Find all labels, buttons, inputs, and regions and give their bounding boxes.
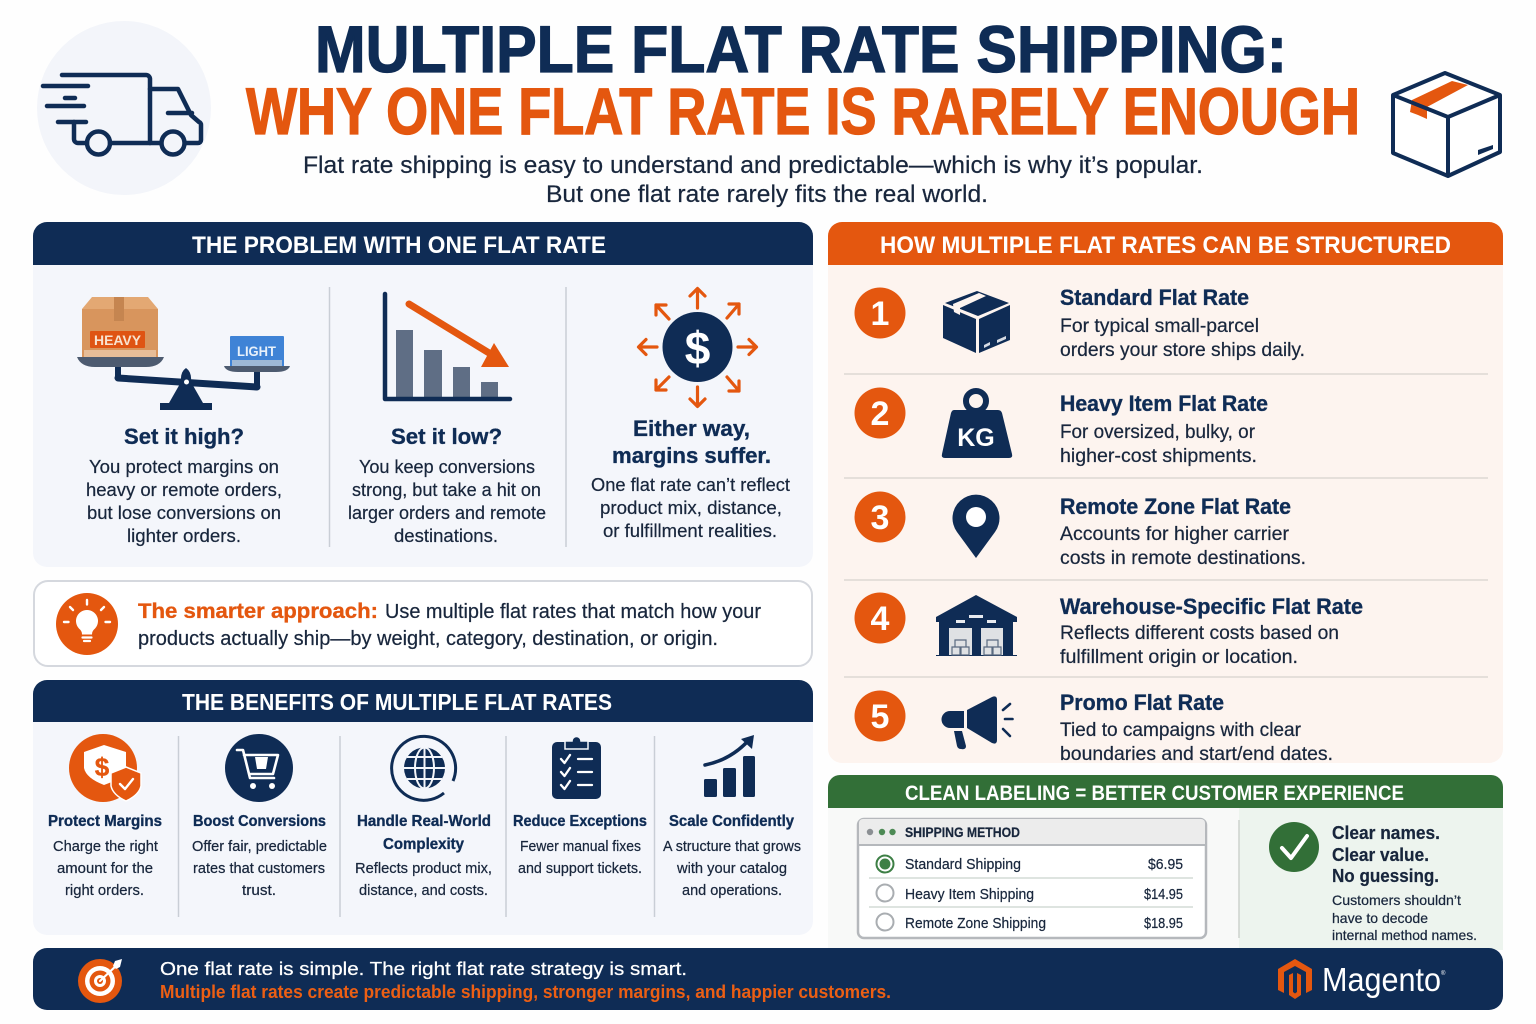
- text: handle real-world complexity: Complexity: [383, 836, 464, 853]
- logo: Magento: ®: [1441, 970, 1446, 977]
- row 1: standard flat rate: [854, 285, 1305, 361]
- icon: green check: [1269, 822, 1319, 872]
- shipping method widget: [858, 819, 1206, 938]
- icon: map pin: [952, 495, 1000, 558]
- text: warehouse-specific flat rate: [1060, 594, 1363, 668]
- callout text: Use multiple flat rates that match how your: [385, 601, 761, 623]
- text: promo flat rate: Tied to campaigns with clear: [1060, 720, 1302, 741]
- icon: light bulb: [56, 593, 118, 655]
- icon: kg weight: KG: [957, 424, 995, 452]
- icon: shopping cart: [225, 734, 293, 802]
- panel: clean labeling: [828, 775, 1503, 950]
- icon: warehouse: [936, 595, 1017, 656]
- text: protect margins: right orders.: [65, 883, 144, 899]
- heading: benefits: THE BENEFITS OF MULTIPLE FLAT RATES: [182, 689, 612, 715]
- option: heavy item shipping: $14.95: [1144, 886, 1183, 903]
- subtitle: Flat rate shipping is easy to understand and predictable—which is why it’s popular.: [303, 152, 1203, 179]
- text: either way: One flat rate can’t reflect: [591, 474, 790, 495]
- option: remote zone shipping: [876, 914, 1183, 932]
- icon: balance scale: [77, 297, 290, 410]
- heading: clean labeling: [828, 775, 1503, 808]
- text: clear names: Customers shouldn’t: [1332, 892, 1461, 908]
- icon: balance scale: LIGHT: [237, 343, 276, 359]
- footer text: One flat rate is simple. The right flat rate strategy is smart.: [160, 958, 687, 979]
- number badge 2: [854, 388, 906, 438]
- heading: problem: [33, 222, 813, 265]
- icon: parcel: [943, 291, 1010, 353]
- text: handle real-world complexity: Reflects product mix,: [355, 861, 492, 877]
- icon: kg weight: [942, 391, 1012, 458]
- icon: globe: [392, 736, 456, 800]
- text: promo flat rate: Promo Flat Rate: [1060, 690, 1224, 715]
- text: heavy item flat rate: For oversized, bulky, or: [1060, 422, 1256, 443]
- text: either way: [591, 416, 790, 541]
- text: handle real-world complexity: distance, and costs.: [359, 883, 488, 899]
- text: handle real-world complexity: [355, 813, 492, 899]
- icon: shield with dollar: $: [95, 752, 110, 782]
- text: either way: or fulfillment realities.: [603, 520, 777, 541]
- text: set it high: Set it high?: [124, 424, 244, 449]
- benefits background: [33, 722, 813, 935]
- callout text: [138, 599, 761, 650]
- footer text: Multiple flat rates create predictable shipping, stronger margins, and happier customers.: [160, 981, 891, 1002]
- icon: dollar with outward arrows: $: [685, 322, 710, 374]
- text: set it low: strong, but take a hit on: [352, 479, 541, 500]
- number badge 5: [854, 690, 906, 742]
- number badge 3: [854, 492, 906, 542]
- callout: the smarter approach: [34, 581, 812, 666]
- text: remote zone flat rate: Accounts for higher carrier: [1060, 524, 1290, 545]
- title: MULTIPLE FLAT RATE SHIPPING:: [315, 12, 1287, 86]
- icon: balance scale: HEAVY: [94, 332, 142, 348]
- text: boost conversions: [192, 813, 327, 899]
- text: warehouse-specific flat rate: Reflects different costs based on: [1060, 623, 1339, 644]
- row 4: warehouse-specific flat rate: [854, 592, 1363, 668]
- text: reduce exceptions: [513, 813, 647, 877]
- text: clear names: have to decode: [1332, 910, 1428, 926]
- text: reduce exceptions: Fewer manual fixes: [520, 839, 641, 855]
- heading: problem: THE PROBLEM WITH ONE FLAT RATE: [192, 232, 606, 259]
- structures background: [828, 265, 1503, 763]
- title: [246, 12, 1360, 148]
- panel: how multiple flat rates can be structured: [828, 222, 1503, 765]
- row 3: remote zone flat rate: [854, 492, 1306, 569]
- text: clear names: Clear value.: [1332, 844, 1429, 865]
- text: set it high: but lose conversions on: [87, 502, 281, 523]
- text: set it low: larger orders and remote: [348, 502, 546, 523]
- heading: structures: HOW MULTIPLE FLAT RATES CAN BE STRUCTURED: [880, 232, 1451, 259]
- callout text: The smarter approach:: [138, 599, 378, 623]
- text: set it high: heavy or remote orders,: [86, 479, 282, 500]
- heading: clean labeling: CLEAN LABELING = BETTER CUSTOMER EXPERIENCE: [905, 782, 1404, 805]
- clean labeling background: [828, 808, 1503, 950]
- text: standard flat rate: [1060, 285, 1305, 361]
- icon: megaphone: [942, 696, 1012, 749]
- text: handle real-world complexity: Handle Real-World: [357, 813, 491, 830]
- text: scale confidently: and operations.: [682, 883, 782, 899]
- text: boost conversions: trust.: [242, 883, 276, 899]
- number badge 4: 4: [871, 600, 890, 638]
- text: protect margins: [48, 813, 162, 899]
- text: set it high: [86, 424, 282, 546]
- text: set it low: Set it low?: [391, 424, 502, 449]
- icon: dollar with outward arrows: [638, 288, 756, 406]
- text: scale confidently: Scale Confidently: [669, 813, 794, 830]
- footer text: [160, 958, 891, 1002]
- text: clear names: internal method names.: [1332, 927, 1477, 943]
- icon: clipboard checklist: [552, 736, 601, 799]
- subtitle: [303, 152, 1203, 208]
- text: heavy item flat rate: Heavy Item Flat Rate: [1060, 391, 1268, 416]
- option: standard shipping: $6.95: [1148, 856, 1183, 873]
- text: clear names: No guessing.: [1332, 865, 1439, 886]
- text: standard flat rate: For typical small-parcel: [1060, 316, 1259, 337]
- icon: shield with dollar: [69, 734, 141, 802]
- text: promo flat rate: [1060, 690, 1333, 765]
- text: set it high: lighter orders.: [127, 525, 241, 546]
- text: either way: Either way,: [633, 416, 750, 441]
- logo: Magento: [1278, 959, 1446, 999]
- text: warehouse-specific flat rate: fulfillment origin or location.: [1060, 647, 1298, 668]
- subtitle: But one flat rate rarely fits the real world.: [546, 181, 988, 208]
- text: clear names: Clear names.: [1332, 822, 1440, 843]
- shipping method widget: SHIPPING METHOD: [905, 825, 1020, 840]
- text: reduce exceptions: Reduce Exceptions: [513, 813, 647, 830]
- option: heavy item shipping: [876, 884, 1183, 903]
- option: standard shipping: Standard Shipping: [905, 856, 1021, 873]
- text: clear names: [1332, 822, 1477, 943]
- text: protect margins: Protect Margins: [48, 813, 162, 830]
- text: remote zone flat rate: [1060, 494, 1306, 569]
- heading: structures: [828, 222, 1503, 265]
- text: set it high: You protect margins on: [89, 456, 279, 477]
- text: standard flat rate: orders your store ships daily.: [1060, 340, 1305, 361]
- chart: falling bars with arrow: [385, 294, 510, 399]
- text: either way: product mix, distance,: [600, 497, 782, 518]
- text: set it low: You keep conversions: [359, 456, 535, 477]
- icon: shipping box: [1393, 73, 1500, 176]
- panel background: [33, 265, 813, 567]
- text: boost conversions: rates that customers: [193, 861, 325, 877]
- text: set it low: destinations.: [394, 525, 498, 546]
- text: boost conversions: Offer fair, predictable: [192, 839, 327, 855]
- text: standard flat rate: Standard Flat Rate: [1060, 285, 1249, 310]
- text: remote zone flat rate: Remote Zone Flat Rate: [1060, 494, 1291, 519]
- number badge 1: [854, 288, 906, 338]
- text: protect margins: Charge the right: [53, 839, 158, 855]
- option: heavy item shipping: Heavy Item Shipping: [905, 886, 1034, 903]
- row 5: promo flat rate: [854, 690, 1333, 765]
- footer banner: [33, 948, 1503, 1010]
- icon: target: [78, 959, 122, 1003]
- text: set it low: [348, 424, 546, 546]
- text: heavy item flat rate: [1060, 391, 1268, 467]
- number badge 2: 2: [871, 395, 889, 433]
- callout text: products actually ship—by weight, category, destination, or origin.: [138, 628, 718, 650]
- text: protect margins: amount for the: [57, 861, 153, 877]
- text: scale confidently: [663, 813, 801, 899]
- panel: the problem with one flat rate: [33, 222, 813, 567]
- text: reduce exceptions: and support tickets.: [518, 861, 642, 877]
- option: remote zone shipping: Remote Zone Shipping: [905, 915, 1046, 932]
- text: scale confidently: with your catalog: [676, 861, 787, 877]
- logo: Magento: Magento: [1322, 961, 1441, 998]
- heading: benefits: [33, 680, 813, 722]
- number badge 1: 1: [871, 295, 889, 333]
- number badge 3: 3: [871, 499, 889, 537]
- number badge 4: [854, 592, 906, 644]
- text: remote zone flat rate: costs in remote destinations.: [1060, 548, 1306, 569]
- text: heavy item flat rate: higher-cost shipments.: [1060, 446, 1257, 467]
- option: standard shipping: [876, 856, 1183, 873]
- number badge 5: 5: [871, 698, 889, 736]
- panel: the benefits of multiple flat rates: [33, 680, 813, 935]
- option: remote zone shipping: $18.95: [1144, 915, 1183, 932]
- text: scale confidently: A structure that grows: [663, 839, 801, 855]
- text: boost conversions: Boost Conversions: [193, 813, 326, 830]
- icon: delivery truck: [37, 21, 211, 195]
- icon: rising bar chart: [704, 735, 755, 797]
- text: warehouse-specific flat rate: Warehouse-Specific Flat Rate: [1060, 594, 1363, 619]
- text: either way: margins suffer.: [612, 443, 771, 468]
- row 2: heavy item flat rate: [854, 388, 1268, 467]
- text: promo flat rate: boundaries and start/end dates.: [1060, 744, 1333, 765]
